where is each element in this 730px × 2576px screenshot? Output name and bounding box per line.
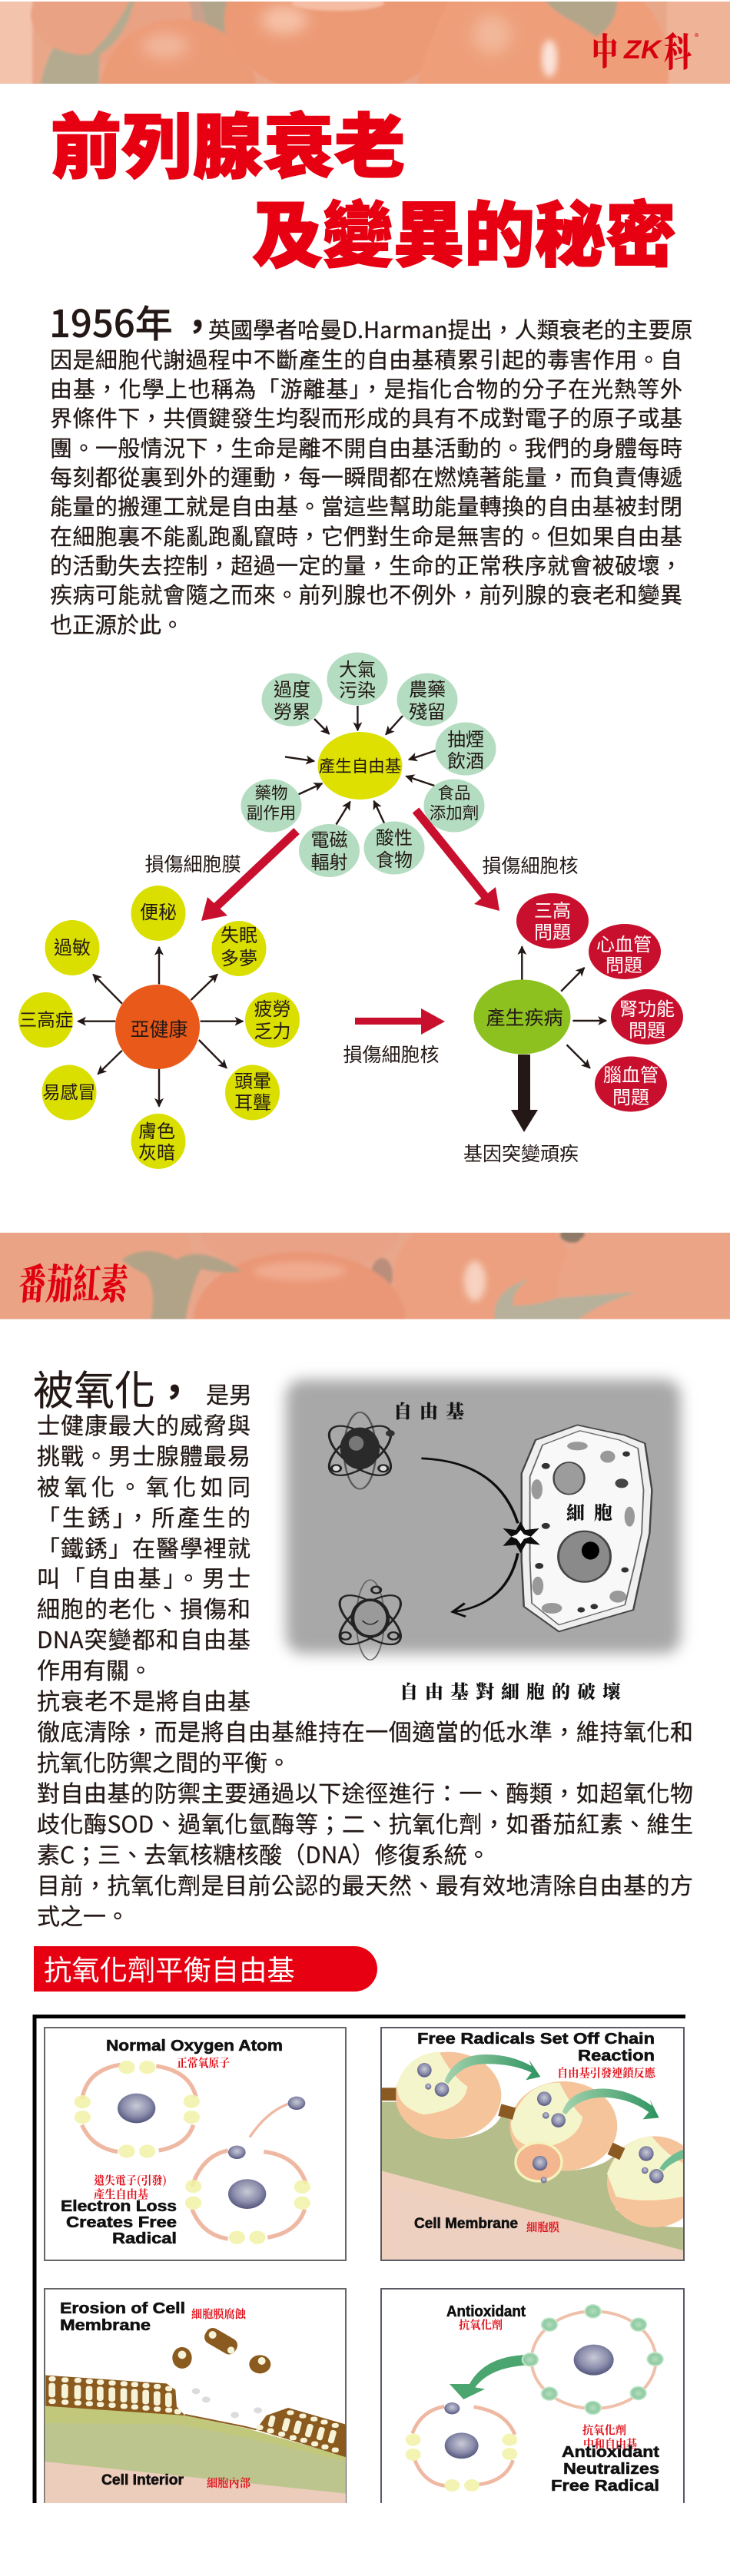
- cause: 大氣污染: 污染: [339, 675, 376, 702]
- oxidation text block: 抗衰老不是將自由基: [37, 1683, 251, 1717]
- disease: 腎功能問題: 腎功能: [619, 994, 675, 1021]
- oxidation text block: 是男: [206, 1376, 252, 1410]
- oxidation text block: 式之一。: [37, 1898, 129, 1932]
- label: 細胞: 細胞: [566, 1498, 612, 1525]
- intro lead year: 1956年: [49, 294, 173, 349]
- cause: 酸性食物: 食物: [376, 845, 413, 872]
- cause: 藥物副作用: 藥物: [254, 780, 288, 804]
- frame: [35, 2017, 685, 2503]
- symptom: 易感冒: [41, 1065, 97, 1120]
- panel: normal oxygen atom: Radical: [112, 2230, 177, 2247]
- free radical atom: [318, 1412, 402, 1489]
- logo: 番茄紅素: 番茄紅素: [17, 1253, 131, 1311]
- oxidation text block: 抗氧化防禦之間的平衡。: [37, 1744, 290, 1778]
- sub-health arrows: [78, 947, 243, 1107]
- cause: 抽煙飲酒: 抽煙: [447, 724, 484, 751]
- panel: erosion of cell membrane: 細胞膜腐蝕: [191, 2306, 247, 2322]
- disease: 腎功能問題: [611, 989, 683, 1045]
- symptom: 疲勞乏力: [245, 992, 300, 1048]
- cause: 電磁輻射: [299, 824, 360, 877]
- panel: free radical chain reaction: 自由基引發連鎖反應: [557, 2064, 656, 2081]
- oxidation text block: 士健康最大的威脅與: [37, 1407, 251, 1441]
- title: [51, 100, 676, 276]
- logo: ZK brand: [592, 21, 698, 78]
- label: 損傷細胞膜: 損傷細胞膜: [144, 849, 241, 877]
- symptom: 過敏: 過敏: [54, 932, 91, 959]
- oxidation text block: 「生銹」，所產生的: [37, 1499, 251, 1533]
- panel: normal oxygen atom: [45, 2028, 346, 2260]
- oxidation text block: [33, 1359, 693, 1932]
- cause: 抽煙飲酒: [435, 722, 496, 776]
- panel: antioxidant neutralizes free radical: Antioxidant: [562, 2444, 659, 2461]
- disease: 腦血管問題: [595, 1057, 667, 1112]
- symptom: 疲勞乏力: 乏力: [254, 1016, 290, 1043]
- red heading pill: 抗氧化劑平衡自由基: [44, 1949, 295, 1988]
- oxidation text block: ，: [154, 1360, 194, 1418]
- symptom: 膚色灰暗: 灰暗: [138, 1137, 175, 1164]
- panel: normal oxygen atom: 遺失電子(引發): [94, 2172, 167, 2188]
- cause: 過度勞累: 勞累: [274, 697, 310, 723]
- intro text block: 每刻都從裏到外的運動，每一瞬間都在燃燒著能量，而負責傳遞: [50, 460, 682, 492]
- panel: free radical chain reaction: [381, 2028, 702, 2260]
- oxidation text block: 挑戰。男士腺體最易: [37, 1438, 251, 1472]
- symptom: 頭暈耳聾: 耳聾: [234, 1088, 271, 1114]
- logo: ZK brand: ZK: [623, 35, 663, 65]
- panel: free radical chain reaction: Free Radicals Set Off Chain: [417, 2031, 655, 2048]
- center: 產生疾病: 產生疾病: [486, 1003, 563, 1031]
- oxidation lead: 被氧化: [33, 1359, 155, 1417]
- oxidation text block: 對自由基的防禦主要通過以下途徑進行：一、酶類，如超氧化物: [37, 1775, 693, 1809]
- panel: antioxidant neutralizes free radical: Antioxidant: [446, 2303, 526, 2320]
- free radical flow diagram: [18, 653, 683, 1169]
- symptom: 便秘: [131, 886, 186, 941]
- disease: 心血管問題: [589, 924, 661, 979]
- panel: normal oxygen atom: Creates Free: [66, 2214, 177, 2231]
- disease: 腦血管問題: 腦血管: [603, 1060, 659, 1087]
- panel: antioxidant neutralizes free radical: Neutralizes: [563, 2461, 659, 2478]
- panel: free radical chain reaction: Reaction: [578, 2048, 655, 2064]
- panel: erosion of cell membrane: [45, 2289, 346, 2503]
- intro text block: 在細胞裏不能亂跑亂竄時，它們對生命是無害的。但如果自由基: [50, 519, 682, 551]
- panel: erosion of cell membrane: Membrane: [60, 2317, 151, 2334]
- disease: 心血管問題: 問題: [606, 950, 642, 977]
- oxidation text block: 「鐵銹」在醫學裡就: [37, 1530, 251, 1564]
- cause: 食品添加劑: 食品: [437, 780, 471, 804]
- panel: antioxidant neutralizes free radical: Free Radical: [551, 2478, 659, 2495]
- symptom: 頭暈耳聾: [225, 1065, 280, 1120]
- symptom: 膚色灰暗: [131, 1114, 186, 1169]
- intro text block: 也正源於此。: [50, 608, 184, 640]
- grey backdrop: [286, 1379, 681, 1654]
- cause: 大氣污染: [327, 653, 387, 705]
- cell: [503, 1425, 652, 1631]
- symptom: 疲勞乏力: 疲勞: [254, 994, 290, 1021]
- intro text block: 由基，化學上也稱為「游離基」，是指化合物的分子在光熱等外: [50, 372, 682, 404]
- oxidation text block: 叫「自由基」。男士: [37, 1560, 251, 1594]
- disease: 三高問題: 三高: [534, 896, 571, 922]
- intro text block: [49, 294, 693, 640]
- symptom: 易感冒: 易感冒: [43, 1078, 95, 1104]
- symptom: 過敏: [45, 920, 100, 975]
- intro text block: 團。一般情況下，生命是離不開自由基活動的。我們的身體每時: [50, 431, 682, 463]
- cause: 酸性食物: 酸性: [376, 823, 413, 849]
- panel: antioxidant neutralizes free radical: 中和自由基: [583, 2435, 637, 2452]
- intro text block: 的活動失去控制，超過一定的量，生命的正常秩序就會被破壞，: [50, 548, 682, 581]
- oxidation text block: 目前，抗氧化劑是目前公認的最天然、最有效地清除自由基的方: [37, 1867, 693, 1901]
- label: 損傷細胞核 middle: 損傷細胞核: [343, 1040, 440, 1068]
- center: 產生疾病: [473, 980, 570, 1054]
- panel: antioxidant neutralizes free radical: [381, 2289, 684, 2503]
- symptom: 頭暈耳聾: 頭暈: [234, 1066, 271, 1093]
- label: 損傷細胞核 right: 損傷細胞核: [482, 851, 579, 879]
- disease: 腎功能問題: 問題: [629, 1015, 665, 1042]
- intro text block: 界條件下，共價鍵發生均裂而形成的具有不成對電子的原子或基: [50, 401, 682, 433]
- cause: 酸性食物: [364, 822, 424, 874]
- oxidation text block: 細胞的老化、損傷和: [37, 1591, 251, 1624]
- center: 產生自由基: 產生自由基: [319, 753, 401, 777]
- black arrow down: [511, 1055, 538, 1132]
- illustration: free radical damaging cell: [277, 1370, 690, 1704]
- reaction arrow: [421, 1459, 518, 1617]
- logo: ZK brand: 科: [664, 21, 692, 78]
- panel: antioxidant neutralizes free radical: 抗氧化劑: [582, 2422, 626, 2438]
- intro text block: 疾病可能就會隨之而來。前列腺也不例外，前列腺的衰老和變異: [50, 578, 682, 610]
- center: 亞健康: [115, 985, 200, 1069]
- center: 亞健康: 亞健康: [130, 1015, 188, 1042]
- four-panel figure: [32, 2015, 685, 2503]
- label: 自由基: 自由基: [393, 1396, 464, 1423]
- symptom: 膚色灰暗: 膚色: [138, 1116, 175, 1143]
- cause: 大氣污染: 大氣: [339, 654, 376, 681]
- oxidation text block: 被氧化。氧化如同: [37, 1468, 251, 1502]
- oxidation text block: 徹底清除，而是將自由基維持在一個適當的低水準，維持氧化和: [37, 1713, 693, 1747]
- disease arrows: [522, 946, 606, 1068]
- symptom: 三高症: 三高症: [19, 1005, 73, 1031]
- panel: normal oxygen atom: 產生自由基: [94, 2186, 148, 2202]
- cause: 電磁輻射: 輻射: [310, 847, 347, 874]
- red arrow to disease: [416, 810, 499, 911]
- cause: 農藥殘留: [397, 673, 458, 727]
- red heading pill: [34, 1946, 377, 1992]
- cause: 過度勞累: 過度: [274, 674, 310, 701]
- center: 產生自由基: [318, 732, 403, 800]
- neutral atom: [329, 1580, 411, 1660]
- banner: tomatoes with lycopene logo: [0, 1233, 730, 1319]
- symptom: 三高症: [18, 992, 73, 1048]
- symptom: 便秘: 便秘: [140, 897, 177, 924]
- symptom: 失眠多夢: [212, 920, 266, 976]
- panel: erosion of cell membrane: Erosion of Cell: [60, 2300, 185, 2317]
- intro text block: 英國學者哈曼D.Harman提出，人類衰老的主要原: [208, 313, 693, 345]
- cause: 藥物副作用: [241, 779, 301, 833]
- panel: normal oxygen atom: Normal Oxygen Atom: [106, 2038, 283, 2055]
- disease: 三高問題: 問題: [534, 917, 571, 944]
- cause: 電磁輻射: 電磁: [310, 825, 347, 852]
- red arrow to sub-health: [201, 831, 297, 921]
- intro text block: 因是細胞代謝過程中不斷產生的自由基積累引起的毒害作用。自: [50, 343, 682, 375]
- oxidation text block: 素C；三、去氧核糖核酸（DNA）修復系統。: [37, 1836, 490, 1870]
- oxidation text block: 作用有關。: [37, 1652, 152, 1686]
- banner: tomatoes with logo: [0, 2, 730, 84]
- panel: erosion of cell membrane: Cell Interior: [101, 2472, 184, 2488]
- cause: 抽煙飲酒: 飲酒: [447, 746, 484, 773]
- disease: 心血管問題: 心血管: [596, 929, 652, 956]
- panel: normal oxygen atom: 正常氧原子: [177, 2055, 230, 2071]
- panel: erosion of cell membrane: 細胞內部: [207, 2475, 251, 2491]
- cause: 食品添加劑: 添加劑: [430, 800, 479, 824]
- cause: 過度勞累: [261, 673, 323, 727]
- panel: antioxidant neutralizes free radical: 抗氧化劑: [459, 2316, 503, 2333]
- oxidation text block: 歧化酶SOD、過氧化氫酶等；二、抗氧化劑，如番茄紅素、維生: [37, 1806, 693, 1839]
- intro text block: ，: [179, 296, 216, 350]
- symptom: 失眠多夢: 多夢: [221, 943, 257, 970]
- intro text block: 能量的搬運工就是自由基。當這些幫助能量轉換的自由基被封閉: [50, 489, 682, 521]
- cause: 農藥殘留: 農藥: [409, 674, 446, 701]
- oxidation text block: DNA突變都和自由基: [37, 1621, 251, 1655]
- disease: 三高問題: [516, 893, 589, 949]
- panel: free radical chain reaction: 細胞膜: [526, 2219, 560, 2235]
- caption: 自由基對細胞的破壞: [400, 1677, 622, 1704]
- cause: 食品添加劑: [424, 779, 484, 833]
- panel: free radical chain reaction: Cell Membrane: [414, 2216, 518, 2232]
- logo: ZK brand: 中: [592, 22, 618, 75]
- cause: 農藥殘留: 殘留: [409, 697, 446, 723]
- red arrow between clusters: [355, 1008, 445, 1035]
- symptom: 失眠多夢: 失眠: [221, 920, 257, 947]
- disease: 腦血管問題: 問題: [612, 1082, 649, 1109]
- cause arrows: [285, 706, 436, 825]
- label: 基因突變頑疾: 基因突變頑疾: [463, 1139, 579, 1167]
- cause: 藥物副作用: 副作用: [247, 800, 296, 824]
- logo: ZK brand: ®: [695, 31, 698, 43]
- panel: normal oxygen atom: Electron Loss: [61, 2198, 177, 2215]
